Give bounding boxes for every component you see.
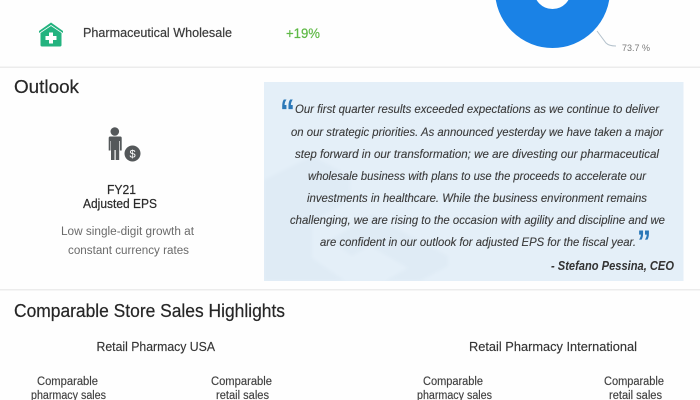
heading: comparable store sales highlights: Comparable Store Sales Highlights (14, 301, 285, 321)
donut value label: 73.7 % (622, 43, 651, 54)
donut chart (514, 0, 651, 54)
title: FY21 adjusted EPS (83, 183, 157, 211)
icon: opening quote mark: “ (280, 93, 295, 129)
label: comparable pharmacy sales international (417, 376, 492, 400)
description: outlook guidance (61, 226, 195, 257)
label: comparable pharmacy sales international: Comparable (423, 376, 483, 388)
label: comparable retail sales (211, 376, 272, 400)
quote text: challenging, we are rising to the occasion with agility and discipline and we (290, 213, 665, 227)
quote text: are confident in our outlook for adjusted EPS for the fiscal year. (320, 235, 636, 249)
value: +19%: +19% (286, 26, 320, 41)
panel: FY21 adjusted EPS (61, 127, 195, 257)
quote text: Our first quarter results exceeded expectations as we continue to deliver (295, 102, 660, 116)
quote text: on our strategic priorities. As announced yesterday we have taken a major (291, 125, 664, 139)
panel: pharmaceutical wholesale row (39, 22, 320, 46)
icon: person with dollar coin: $ (129, 148, 136, 160)
label: comparable pharmacy sales (31, 376, 106, 400)
description: outlook guidance: constant currency rates (68, 245, 189, 257)
watermark shapes (264, 156, 448, 281)
quote background (264, 82, 684, 281)
quote attribution: - Stefano Pessina, CEO (551, 259, 674, 273)
icon: green pharmacy house (39, 22, 63, 46)
icon: closing quote mark: ” (637, 224, 651, 260)
description: outlook guidance: Low single-digit growth at (61, 226, 195, 238)
subheading: retail pharmacy USA: Retail Pharmacy USA (96, 340, 216, 354)
panel: retail pharmacy USA (31, 340, 272, 400)
label: comparable retail sales international (604, 376, 664, 400)
label: comparable pharmacy sales: Comparable (37, 376, 98, 388)
heading: outlook: Outlook (14, 77, 80, 97)
panel: retail pharmacy international (417, 340, 664, 400)
title: FY21 adjusted EPS: Adjusted EPS (83, 197, 157, 211)
quote text (290, 102, 665, 249)
label: comparable retail sales international: Comparable (604, 376, 664, 388)
quote text: wholesale business with plans to use the proceeds to accelerate our (308, 169, 647, 183)
leader line (597, 31, 616, 46)
title: FY21 adjusted EPS: FY21 (107, 183, 136, 197)
label: pharmaceutical wholesale: Pharmaceutical Wholesale (83, 26, 232, 40)
quote text: investments in healthcare. While the business environment remains (307, 191, 647, 205)
panel: CEO quote (264, 82, 684, 281)
subheading: retail pharmacy international: Retail Pharmacy International (469, 340, 637, 354)
label: comparable retail sales: Comparable (211, 376, 272, 388)
quote text: step forward in our transformation; we are divesting our pharmaceutical (295, 147, 659, 161)
